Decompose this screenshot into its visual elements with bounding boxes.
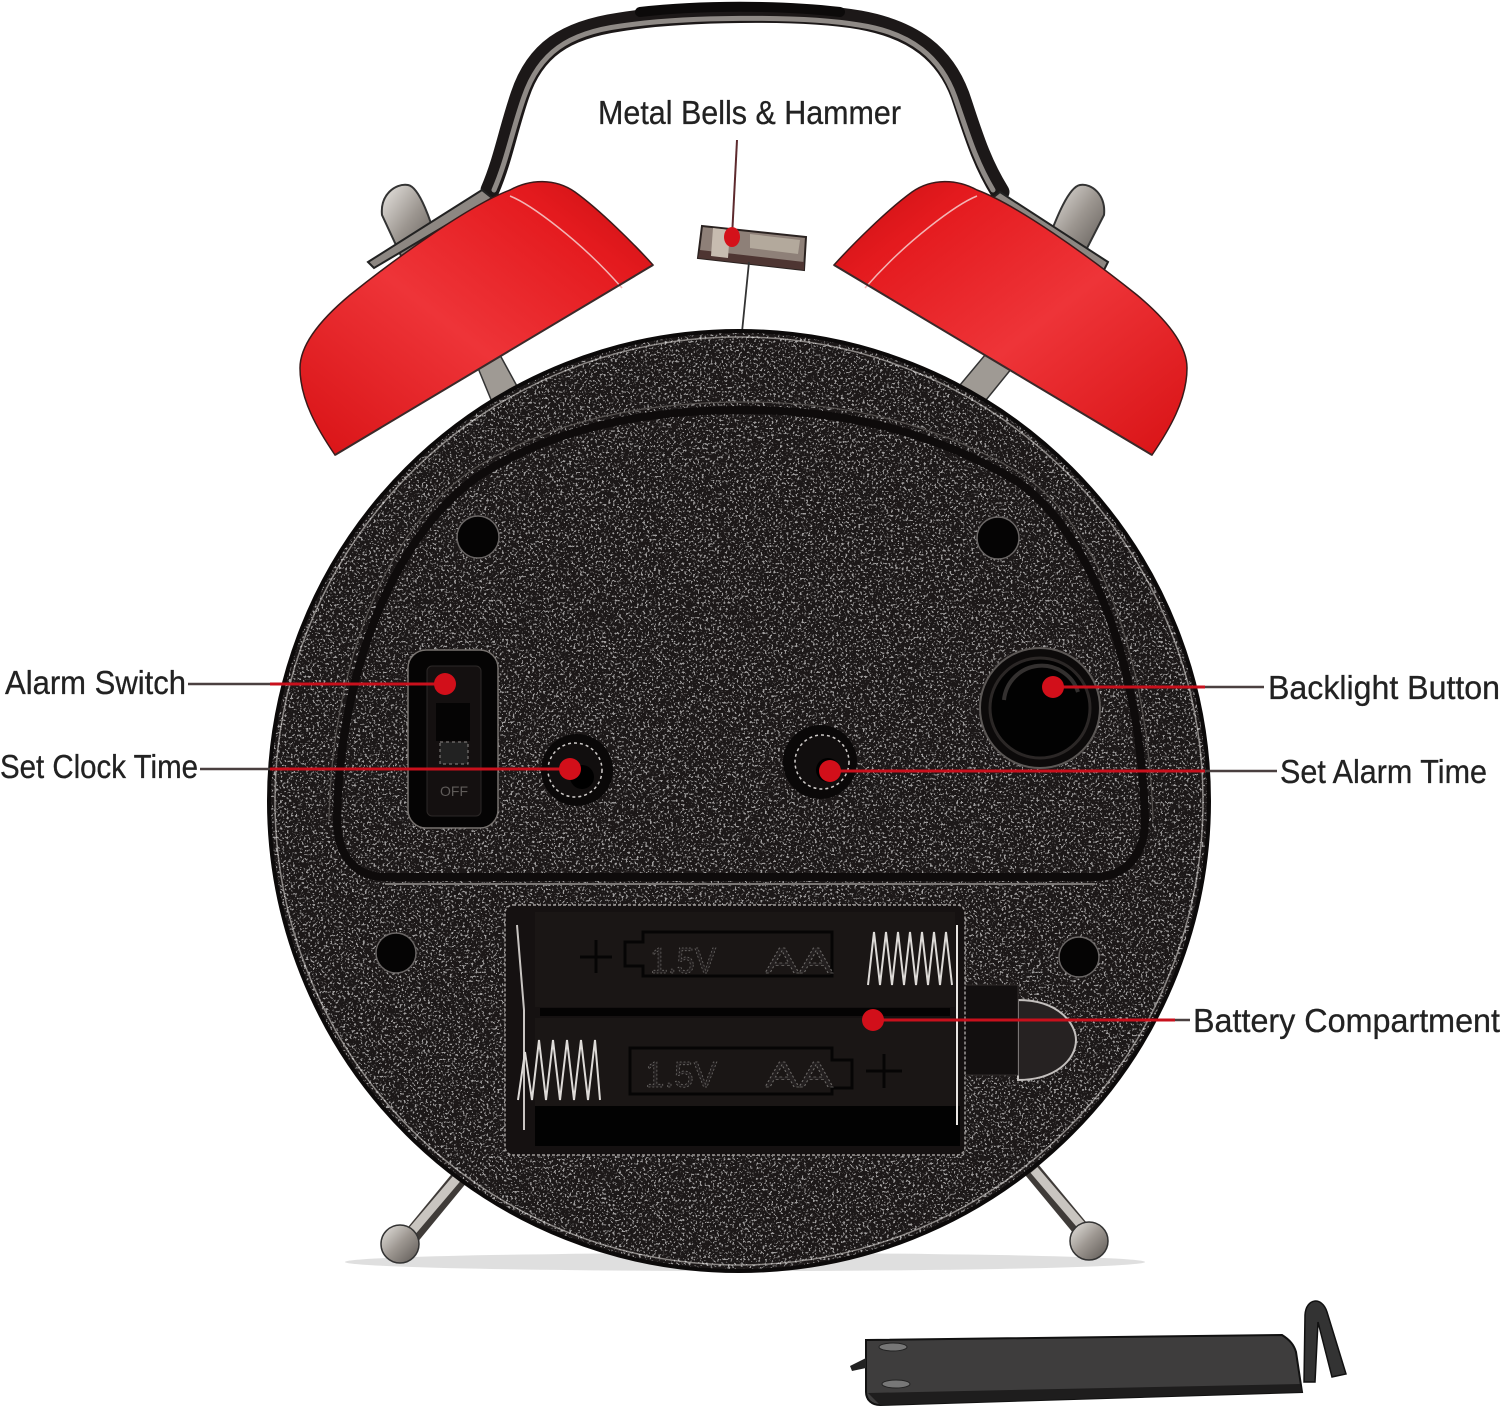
upper battery spring [868,932,952,985]
battery compartment [505,905,1076,1155]
label: Alarm Switch [5,664,456,701]
hammer [698,226,806,270]
label: Backlight Button: Backlight Button [1268,669,1500,706]
label: Alarm Switch: Alarm Switch [5,664,186,701]
battery cover, detached [850,1301,1346,1405]
label: Backlight Button [1042,669,1500,706]
label: Metal Bells & Hammer: Metal Bells & Hammer [598,94,901,131]
alarm time knob [783,725,857,799]
label: Set Clock Time [0,748,581,785]
label: Set Clock Time: Set Clock Time [0,748,198,785]
label: Metal Bells & Hammer [598,94,901,247]
bell post: left [368,185,518,402]
foot: right [1032,1170,1108,1260]
screw holes [376,516,1099,977]
red bell: left [300,182,653,455]
lower battery outline [630,1048,902,1095]
lower battery spring [518,1040,600,1100]
upper battery outline [580,932,833,981]
label: Set Alarm Time: Set Alarm Time [1280,753,1487,790]
stem below hammer [742,262,749,332]
upper battery outline: 1.5V [650,940,716,981]
bell post: right [960,185,1108,400]
foot: left [381,1170,466,1263]
carrying handle [490,7,1000,192]
lower battery outline: 1.5V [645,1054,717,1095]
red bell: right [834,182,1187,455]
backlight button [980,648,1100,768]
raised control panel outline [329,402,1153,884]
clock body back plate [260,325,1220,1275]
label: Set Alarm Time [819,753,1487,790]
foot shadow [345,1253,1145,1271]
lower battery outline: AA [765,1054,833,1095]
upper battery outline: AA [765,940,833,981]
label: Battery Compartment [862,1002,1500,1039]
alarm switch slot [408,650,498,828]
clock time knob [541,734,613,806]
label: Battery Compartment: Battery Compartment [1193,1002,1500,1039]
alarm switch slot: OFF [440,783,468,799]
